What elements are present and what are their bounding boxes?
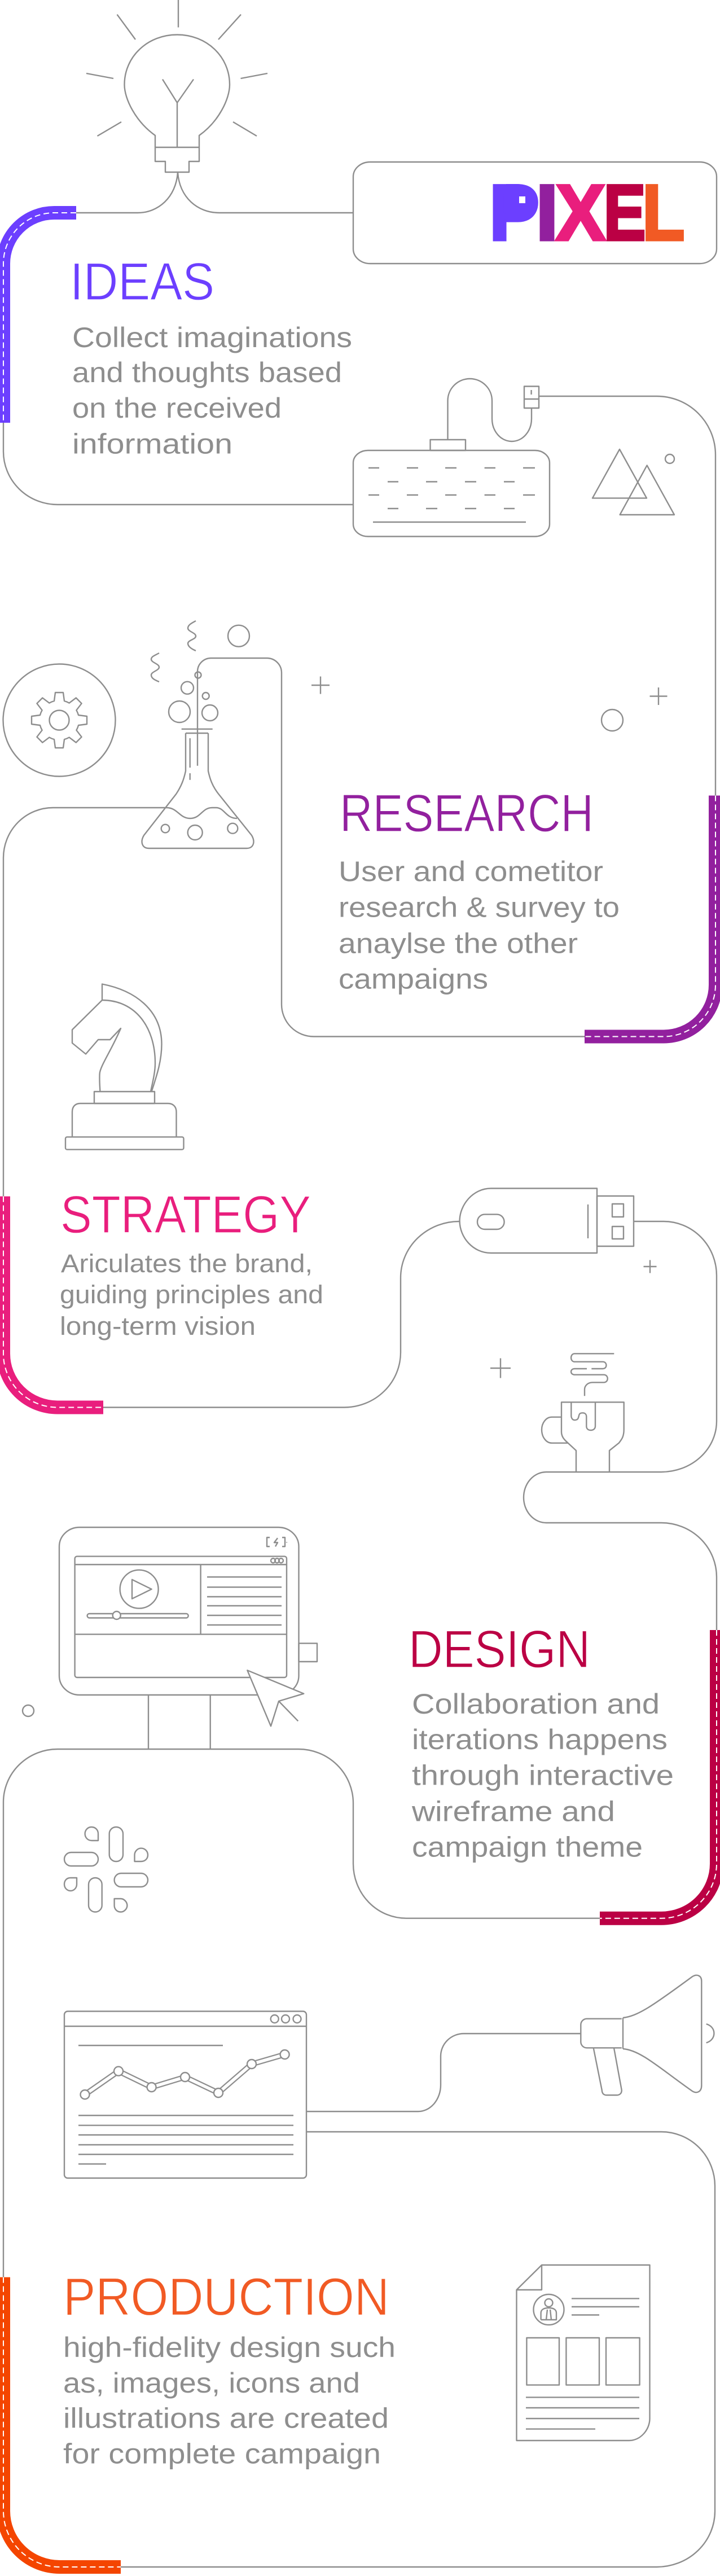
heading: IDEAS: IDEAS — [70, 252, 214, 311]
body: production: as, images, icons and — [63, 2367, 360, 2399]
coloured wire: research — [585, 796, 715, 1036]
logo: PIXEL: P — [489, 168, 539, 257]
body: design: campaign theme — [412, 1832, 643, 1863]
panel: strategy — [3, 984, 657, 1408]
body: strategy: Ariculates the brand, — [61, 1249, 313, 1278]
body: research: User and cometitor — [339, 856, 603, 887]
panel: production — [3, 1975, 714, 2567]
heading: STRATEGY: STRATEGY — [60, 1185, 311, 1244]
logo: PIXEL: L — [642, 168, 685, 257]
body: production: high-fidelity design such — [63, 2332, 396, 2363]
icon: cursor arrow — [247, 1670, 304, 1726]
body: ideas — [72, 322, 352, 460]
icon: flask — [142, 621, 253, 848]
icon: megaphone — [581, 1975, 714, 2095]
heading: DESIGN: DESIGN — [409, 1619, 590, 1679]
icon: keyboard and mouse plug — [353, 386, 550, 536]
body: ideas: and thoughts based — [72, 357, 342, 388]
body: research: campaigns — [339, 963, 488, 995]
body: design: Collaboration and — [412, 1688, 660, 1720]
decoration: small circle — [23, 1705, 34, 1716]
heading: RESEARCH: RESEARCH — [340, 783, 594, 843]
body: design: iterations happens — [412, 1724, 668, 1755]
icon: chess knight — [65, 984, 184, 1150]
coloured wire: design — [600, 1630, 717, 1918]
coloured wire: production — [3, 2277, 121, 2567]
body: production: illustrations are created — [63, 2403, 389, 2434]
body: strategy: long-term vision — [60, 1312, 256, 1340]
icon: USB stick — [460, 1189, 657, 1273]
body: research: research & survey to — [339, 892, 620, 923]
body: design: wireframe and — [411, 1796, 615, 1828]
logo box — [353, 162, 717, 264]
icon: gear — [3, 664, 115, 777]
icon: slack-style logo — [64, 1827, 148, 1912]
icon: browser chart — [64, 2012, 306, 2178]
decorations: research — [311, 676, 667, 731]
body: research — [339, 856, 620, 995]
body: research: anaylse the other — [339, 928, 578, 960]
heading: PRODUCTION: PRODUCTION — [63, 2267, 389, 2327]
icon: triangles — [592, 449, 674, 515]
body: strategy — [60, 1249, 323, 1340]
body: strategy: guiding principles and — [60, 1280, 323, 1309]
icon: coffee cup — [490, 1353, 624, 1472]
icon: light bulb — [86, 0, 267, 172]
body: design — [411, 1688, 674, 1863]
body: ideas: on the received — [72, 392, 282, 424]
logo: PIXEL — [489, 168, 685, 257]
body: ideas: Collect imaginations — [72, 322, 352, 353]
icon: monitor — [59, 1527, 317, 1749]
logo: PIXEL: X — [556, 168, 605, 257]
coloured wire: ideas — [3, 213, 76, 423]
icon: document — [517, 2265, 650, 2441]
logo: PIXEL: I — [536, 168, 559, 257]
body: ideas: information — [72, 428, 232, 460]
panel: research — [3, 621, 715, 1036]
body: design: through interactive — [412, 1760, 674, 1791]
coloured wire: strategy — [3, 1197, 103, 1408]
panel: ideas — [3, 0, 717, 536]
logo: PIXEL: E — [604, 168, 646, 257]
body: production: for complete campaign — [63, 2438, 381, 2470]
body: production — [63, 2332, 396, 2470]
panel: design — [23, 1353, 717, 1918]
